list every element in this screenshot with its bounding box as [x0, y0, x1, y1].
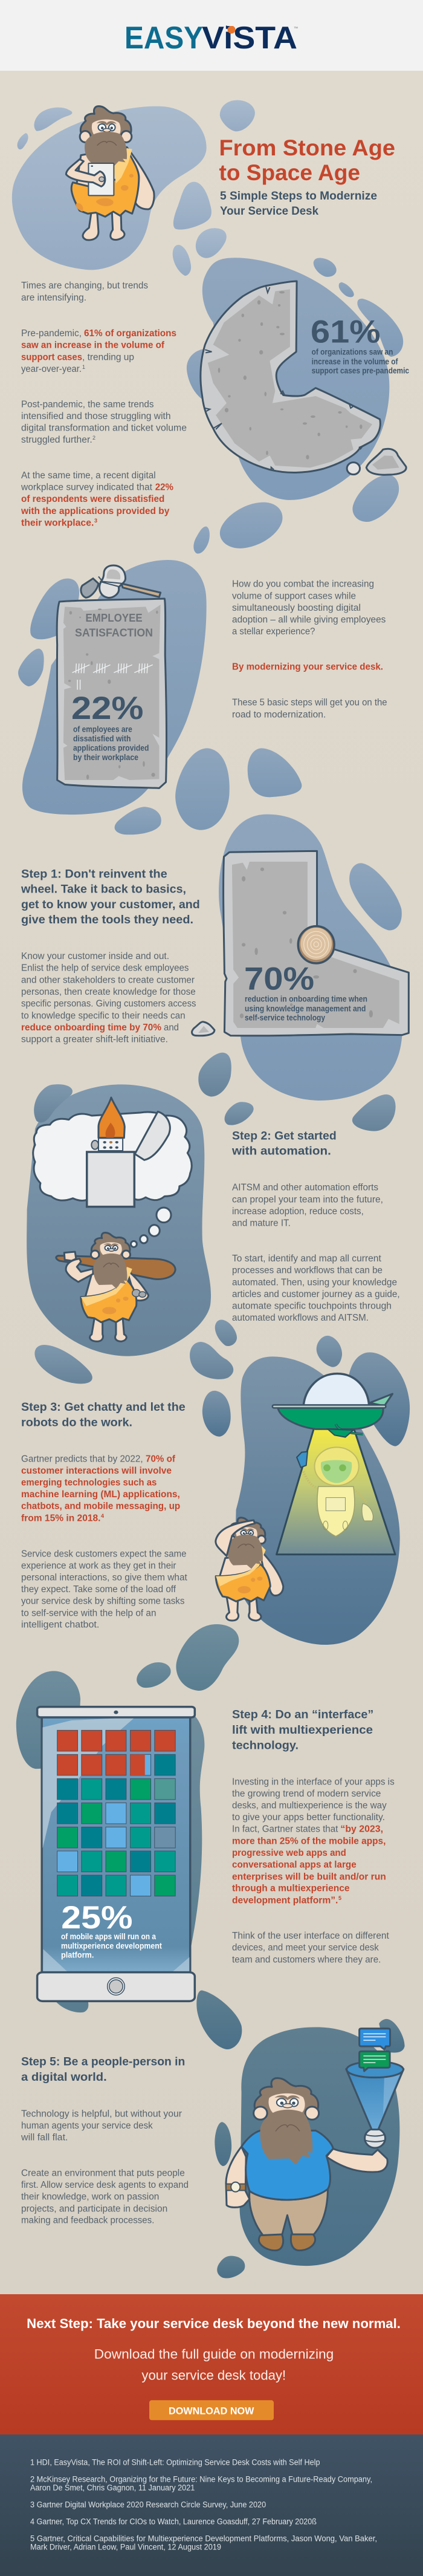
heading: step 5: Step 5: Be a people-person in — [21, 2055, 185, 2069]
illustration: man with funnel — [226, 2078, 387, 2251]
stat: 70%: using knowledge management and — [245, 1003, 366, 1013]
text block: 5 basic steps — [232, 698, 387, 720]
text block: post-pandemic: Post-pandemic, the same trends — [21, 399, 154, 409]
stat: 70%: 70% — [244, 961, 314, 997]
stat: 22%: of employees are — [73, 724, 132, 734]
stat: 25% — [61, 1900, 162, 1960]
text block: step 5: will fall flat. — [21, 2132, 68, 2142]
text block: step 4: “by 2023, — [340, 1824, 383, 1835]
text block: step 3 prediction: 70% of — [146, 1454, 176, 1464]
heading: step 1 — [21, 868, 200, 926]
icon: small rocks — [347, 449, 406, 475]
panel: stone tablet — [57, 599, 167, 788]
logo: EasyVista: EASY — [124, 21, 203, 56]
icon: pebble — [192, 1022, 215, 1036]
text block: step 5 — [21, 2109, 189, 2226]
heading: step 3 — [21, 1400, 186, 1429]
text block: step 2: articles and customer journey as a guide, — [232, 1289, 400, 1299]
text block: how do you combat: simultaneously boosting digital — [232, 603, 361, 613]
tablet label: SATISFACTION — [75, 627, 153, 639]
text block: 5 basic steps: road to modernization. — [232, 709, 326, 720]
text block: step 4: conversational apps at large — [232, 1860, 357, 1870]
text block: 22% dissatisfied: with the applications provided by — [21, 506, 170, 516]
text block: step 3 prediction: machine learning (ML) applications, — [21, 1489, 180, 1500]
panel: references: 5 Gartner, Critical Capabilities for Multiexperience Development Platforms, Jason Wong, Van Baker, — [30, 2534, 377, 2543]
heading: step 5: a digital world. — [21, 2070, 107, 2084]
section: step 2 caveman dreaming of lighter — [27, 1084, 342, 1384]
stat: 25%: platform. — [61, 1950, 94, 1960]
text block: pre-pandemic stat: , trending up — [82, 352, 134, 362]
text block: pre-pandemic stat: 1 — [82, 364, 85, 370]
stat: 25%: 25% — [61, 1900, 133, 1936]
panel: references — [0, 2435, 423, 2576]
text block: step 1: and — [164, 1023, 179, 1033]
text block: step 5: their knowledge, work on passion — [21, 2192, 159, 2202]
heading: step 3: Step 3: Get chatty and let the — [21, 1400, 186, 1414]
text block: step 3 prediction: 4 — [101, 1513, 104, 1519]
stat: 70%: self-service technology — [245, 1013, 325, 1023]
logo: EasyVista — [124, 21, 298, 56]
text block: step 2: increase adoption, reduce costs, — [232, 1206, 364, 1217]
stat: 70% — [244, 961, 367, 1023]
text block: step 4: desks, and multiexperience is the way — [232, 1801, 387, 1811]
text block: step 4: to give your apps better functionality. — [232, 1812, 385, 1823]
intro copy: Times are changing, but trends — [21, 281, 148, 291]
panel: call to action: Download the full guide on modernizing — [94, 2347, 334, 2362]
illustration: green saucer — [273, 1374, 393, 1437]
stat: 22%: by their workplace — [73, 752, 138, 762]
text block: step 4: more than 25% of the mobile apps, — [232, 1836, 386, 1846]
text block: step 2: automate specific touchpoints through — [232, 1301, 392, 1312]
heading: step 1: wheel. Take it back to basics, — [21, 883, 186, 896]
intro copy — [21, 281, 148, 303]
icon: lighter with flame — [87, 1098, 170, 1207]
section: step 1 stone wheel — [192, 815, 408, 1131]
text block: pre-pandemic stat: 61% of organizations — [84, 328, 176, 339]
text block: step 4: Investing in the interface of your apps is — [232, 1777, 395, 1787]
text block: step 5: Technology is helpful, but without your — [21, 2109, 182, 2119]
heading: step 1: give them the tools they need. — [21, 913, 193, 926]
text block: step 1: specific personas. Giving customers access — [21, 999, 196, 1009]
text block: 22% dissatisfied: 3 — [94, 518, 97, 524]
text block: step 1: reduce onboarding time by 70% — [21, 1023, 161, 1033]
text block: post-pandemic — [21, 399, 187, 445]
text block: step 3 customers: to self-service with the help of an — [21, 1608, 156, 1618]
tablet label: EMPLOYEE — [86, 612, 143, 624]
panel: call to action: Next Step: Take your service desk beyond the new normal. — [27, 2316, 401, 2331]
stat: 22%: applications provided — [73, 743, 149, 753]
text block: post-pandemic: struggled further. — [21, 435, 92, 445]
illustration: thought cloud — [33, 1112, 192, 1247]
text block: step 3 prediction: chatbots, and mobile messaging, up — [21, 1501, 180, 1512]
text block: step 3 customers — [21, 1549, 187, 1630]
panel: references: Mark Driver, Adrian Leow, Paul Vincent, 12 August 2019 — [30, 2542, 221, 2551]
tablet label — [75, 612, 153, 639]
text block: step 4: the growing trend of modern service — [232, 1789, 381, 1799]
heading: step 2: Step 2: Get started — [232, 1129, 337, 1142]
text block: how do you combat: adoption – all while giving employees — [232, 614, 386, 625]
stat: 61%: increase in the volume of — [312, 356, 398, 366]
heading: step 4 — [232, 1708, 373, 1752]
section: step 4 phone — [16, 1671, 242, 2049]
text block: step 4: through a multiexperience — [232, 1884, 350, 1894]
heading: step 2 — [231, 1129, 337, 1158]
chart: stone pie — [201, 281, 380, 472]
text block: pre-pandemic stat: support cases — [21, 352, 82, 362]
illustration: caveman shading his eyes — [216, 1518, 283, 1621]
text block: pre-pandemic stat: Pre-pandemic, — [21, 328, 82, 339]
text block: step 2: and mature IT. — [232, 1218, 291, 1228]
stat: 22%: 22% — [71, 691, 144, 726]
section: step 3 UFO and caveman — [137, 1352, 410, 1691]
text block: post-pandemic: intensified and those struggling with — [21, 411, 171, 421]
illustration: phone — [37, 1707, 195, 2001]
intro copy: are intensifying. — [21, 293, 86, 303]
text block: step 5: human agents your service desk — [21, 2121, 153, 2131]
text block: step 5: Create an environment that puts people — [21, 2168, 185, 2178]
text block: step 4: progressive web apps and — [232, 1848, 346, 1858]
text block: step 1: and other stakeholders to create customer — [21, 975, 195, 985]
text block: step 3 prediction: emerging technologies such as — [21, 1478, 157, 1488]
text block: post-pandemic: 2 — [92, 435, 95, 441]
text block: step 3 customers: your service desk by shifting some tasks — [21, 1596, 185, 1607]
text block: step 5: first. Allow service desk agents to expand — [21, 2180, 189, 2190]
text block: step 5: projects, and participate in decision — [21, 2204, 167, 2214]
title block: Your Service Desk — [220, 204, 318, 218]
text block: step 3 customers: intelligent chatbot. — [21, 1620, 99, 1630]
logo: EasyVista: ™ — [294, 27, 298, 31]
text block: by modernizing: By modernizing your service desk. — [232, 662, 383, 672]
button: download now: DOWNLOAD NOW — [169, 2405, 254, 2416]
chart: 25% app tile grid — [57, 1730, 175, 1896]
text block: step 1 — [21, 951, 196, 1044]
section: employee satisfaction tablet — [18, 560, 302, 834]
text block: step 2: can propel your team into the future, — [232, 1194, 383, 1205]
heading: step 5 — [21, 2055, 185, 2084]
text block: how do you combat — [232, 579, 386, 637]
text block: post-pandemic: digital transformation and ticket volume — [21, 423, 187, 433]
text block: step 1: Enlist the help of service desk employees — [21, 963, 189, 974]
text block: step 4: 5 — [338, 1895, 341, 1901]
chat bubble: blue — [360, 2029, 390, 2049]
text block: step 2: automated. Then, using your knowledge — [232, 1277, 397, 1287]
text block: step 4: team and customers where they are. — [232, 1954, 381, 1965]
panel: call to action: your service desk today! — [141, 2367, 286, 2382]
text block: step 2: To start, identify and map all current — [232, 1254, 381, 1264]
stat: 25%: of mobile apps will run on a — [61, 1931, 156, 1941]
stat: 22%: dissatisfied with — [73, 733, 131, 743]
section: hero blobs and caveman with tablet — [12, 100, 255, 276]
header bar with logo — [0, 0, 423, 71]
text block: 22% dissatisfied: workplace survey indicated that — [21, 483, 153, 493]
icon: robot astronaut — [303, 1447, 373, 1537]
panel: references: 2 McKinsey Research, Organizing for the Future: Nine Keys to Becoming a Future-Ready Company, — [30, 2474, 372, 2483]
text block: 22% dissatisfied: of respondents were dissatisfied — [21, 494, 164, 504]
stat: 61%: of organizations saw an — [312, 347, 393, 357]
title block: to Space Age — [219, 160, 360, 185]
title block: From Stone Age — [219, 135, 395, 160]
heading: step 1: get to know your customer, and — [21, 898, 200, 911]
text block: step 2: processes and workflows that can be — [232, 1266, 383, 1276]
text block: 22% dissatisfied: their workplace. — [21, 518, 94, 528]
title block — [219, 135, 395, 218]
button: download now — [149, 2400, 274, 2420]
text block: pre-pandemic stat: saw an increase in the volume of — [21, 340, 165, 351]
text block: how do you combat: volume of support cases while — [232, 591, 356, 601]
panel: references: 4 Gartner, Top CX Trends for CIOs to Watch, Laurence Goasduff, 27 February 2020ß — [30, 2517, 317, 2526]
stat: 25%: multixperience development — [61, 1940, 162, 1950]
text block: step 3 customers: Service desk customers expect the same — [21, 1549, 186, 1559]
text block: step 1: to knowledge specific to their needs can — [21, 1010, 186, 1021]
text block: step 3 customers: experience at work as they get in their — [21, 1561, 176, 1571]
text block: step 3 prediction — [21, 1454, 180, 1523]
icon: stone hammer — [81, 565, 161, 597]
logo: EasyVista: ViSTA — [202, 21, 297, 56]
panel: references: 3 Gartner Digital Workplace 2020 Research Circle Survey, June 2020 — [30, 2500, 266, 2509]
text block: pre-pandemic stat — [21, 328, 176, 374]
panel: references: Aaron De Smet, Chris Gagnon, 11 January 2021 — [30, 2483, 195, 2492]
section: 61% stone pie chart — [187, 258, 406, 553]
heading: step 4: lift with multiexperience — [232, 1723, 373, 1737]
text block: step 2: automated workflows and AITSM. — [232, 1313, 369, 1323]
icon: funnel with chat bubbles — [346, 2029, 404, 2148]
text block: 5 basic steps: These 5 basic steps will get you on the — [232, 698, 387, 708]
text block: step 3 prediction: Gartner predicts that by 2022, — [21, 1454, 143, 1464]
illustration: tractor beam with alien robot — [277, 1427, 395, 1555]
text block: step 2: AITSM and other automation efforts — [232, 1183, 378, 1193]
icon: log cross-section — [298, 926, 334, 963]
illustration: caveman with club — [56, 1232, 175, 1341]
text block: step 2 — [232, 1183, 400, 1323]
text block: step 4: devices, and meet your service desk — [232, 1943, 379, 1953]
text block: how do you combat: How do you combat the increasing — [232, 579, 374, 590]
text block: step 3 prediction: customer interactions will involve — [21, 1466, 172, 1476]
illustration: caveman holding tablet — [66, 106, 154, 240]
text block: 22% dissatisfied: 22% — [155, 483, 173, 493]
heading: step 3: robots do the work. — [21, 1416, 132, 1429]
stat: 61% — [311, 314, 409, 376]
text block: step 1: support a greater shift-left initiative. — [21, 1034, 168, 1044]
chart: stone wheel slab — [224, 851, 408, 1036]
text block: step 3 customers: personal interactions, so give them what — [21, 1572, 187, 1582]
text block: step 5: making and feedback processes. — [21, 2216, 154, 2226]
title block: 5 Simple Steps to Modernize — [220, 189, 377, 203]
text block: 22% dissatisfied: At the same time, a recent digital — [21, 470, 156, 481]
heading: step 2: with automation. — [231, 1145, 331, 1158]
text block: step 4 — [232, 1777, 395, 1965]
tally marks — [73, 663, 153, 690]
text block: step 1: Know your customer inside and out. — [21, 951, 169, 961]
stat: 22% — [71, 691, 149, 762]
text block: how do you combat: a stellar experience? — [232, 626, 315, 637]
heading: step 4: technology. — [232, 1738, 299, 1752]
panel: references: 1 HDI, EasyVista, The ROI of Shift-Left: Optimizing Service Desk Costs with Self Help — [30, 2457, 320, 2467]
text block: step 1: personas, then create knowledge for those — [21, 987, 196, 997]
text block: 22% dissatisfied — [21, 470, 173, 528]
text block: step 4: Think of the user interface on different — [232, 1931, 389, 1941]
heading: step 1: Step 1: Don't reinvent the — [21, 868, 167, 881]
text block: pre-pandemic stat: year-over-year. — [21, 364, 82, 374]
text block: step 4: enterprises will be built and/or run — [232, 1872, 386, 1882]
section: step 5 digital man — [215, 2019, 405, 2278]
stat: 61%: 61% — [311, 314, 381, 350]
text block: step 4: In fact, Gartner states that — [232, 1824, 338, 1835]
stat: 70%: reduction in onboarding time when — [245, 994, 367, 1004]
heading: step 4: Step 4: Do an “interface” — [232, 1708, 373, 1722]
chat bubble: green — [360, 2051, 390, 2071]
text block: step 3 prediction: from 15% in 2018. — [21, 1513, 100, 1523]
panel: call to action — [0, 2294, 423, 2435]
text block: step 4: development platform”. — [232, 1895, 338, 1905]
text block: step 3 customers: they expect. Take some of the load off — [21, 1584, 176, 1595]
